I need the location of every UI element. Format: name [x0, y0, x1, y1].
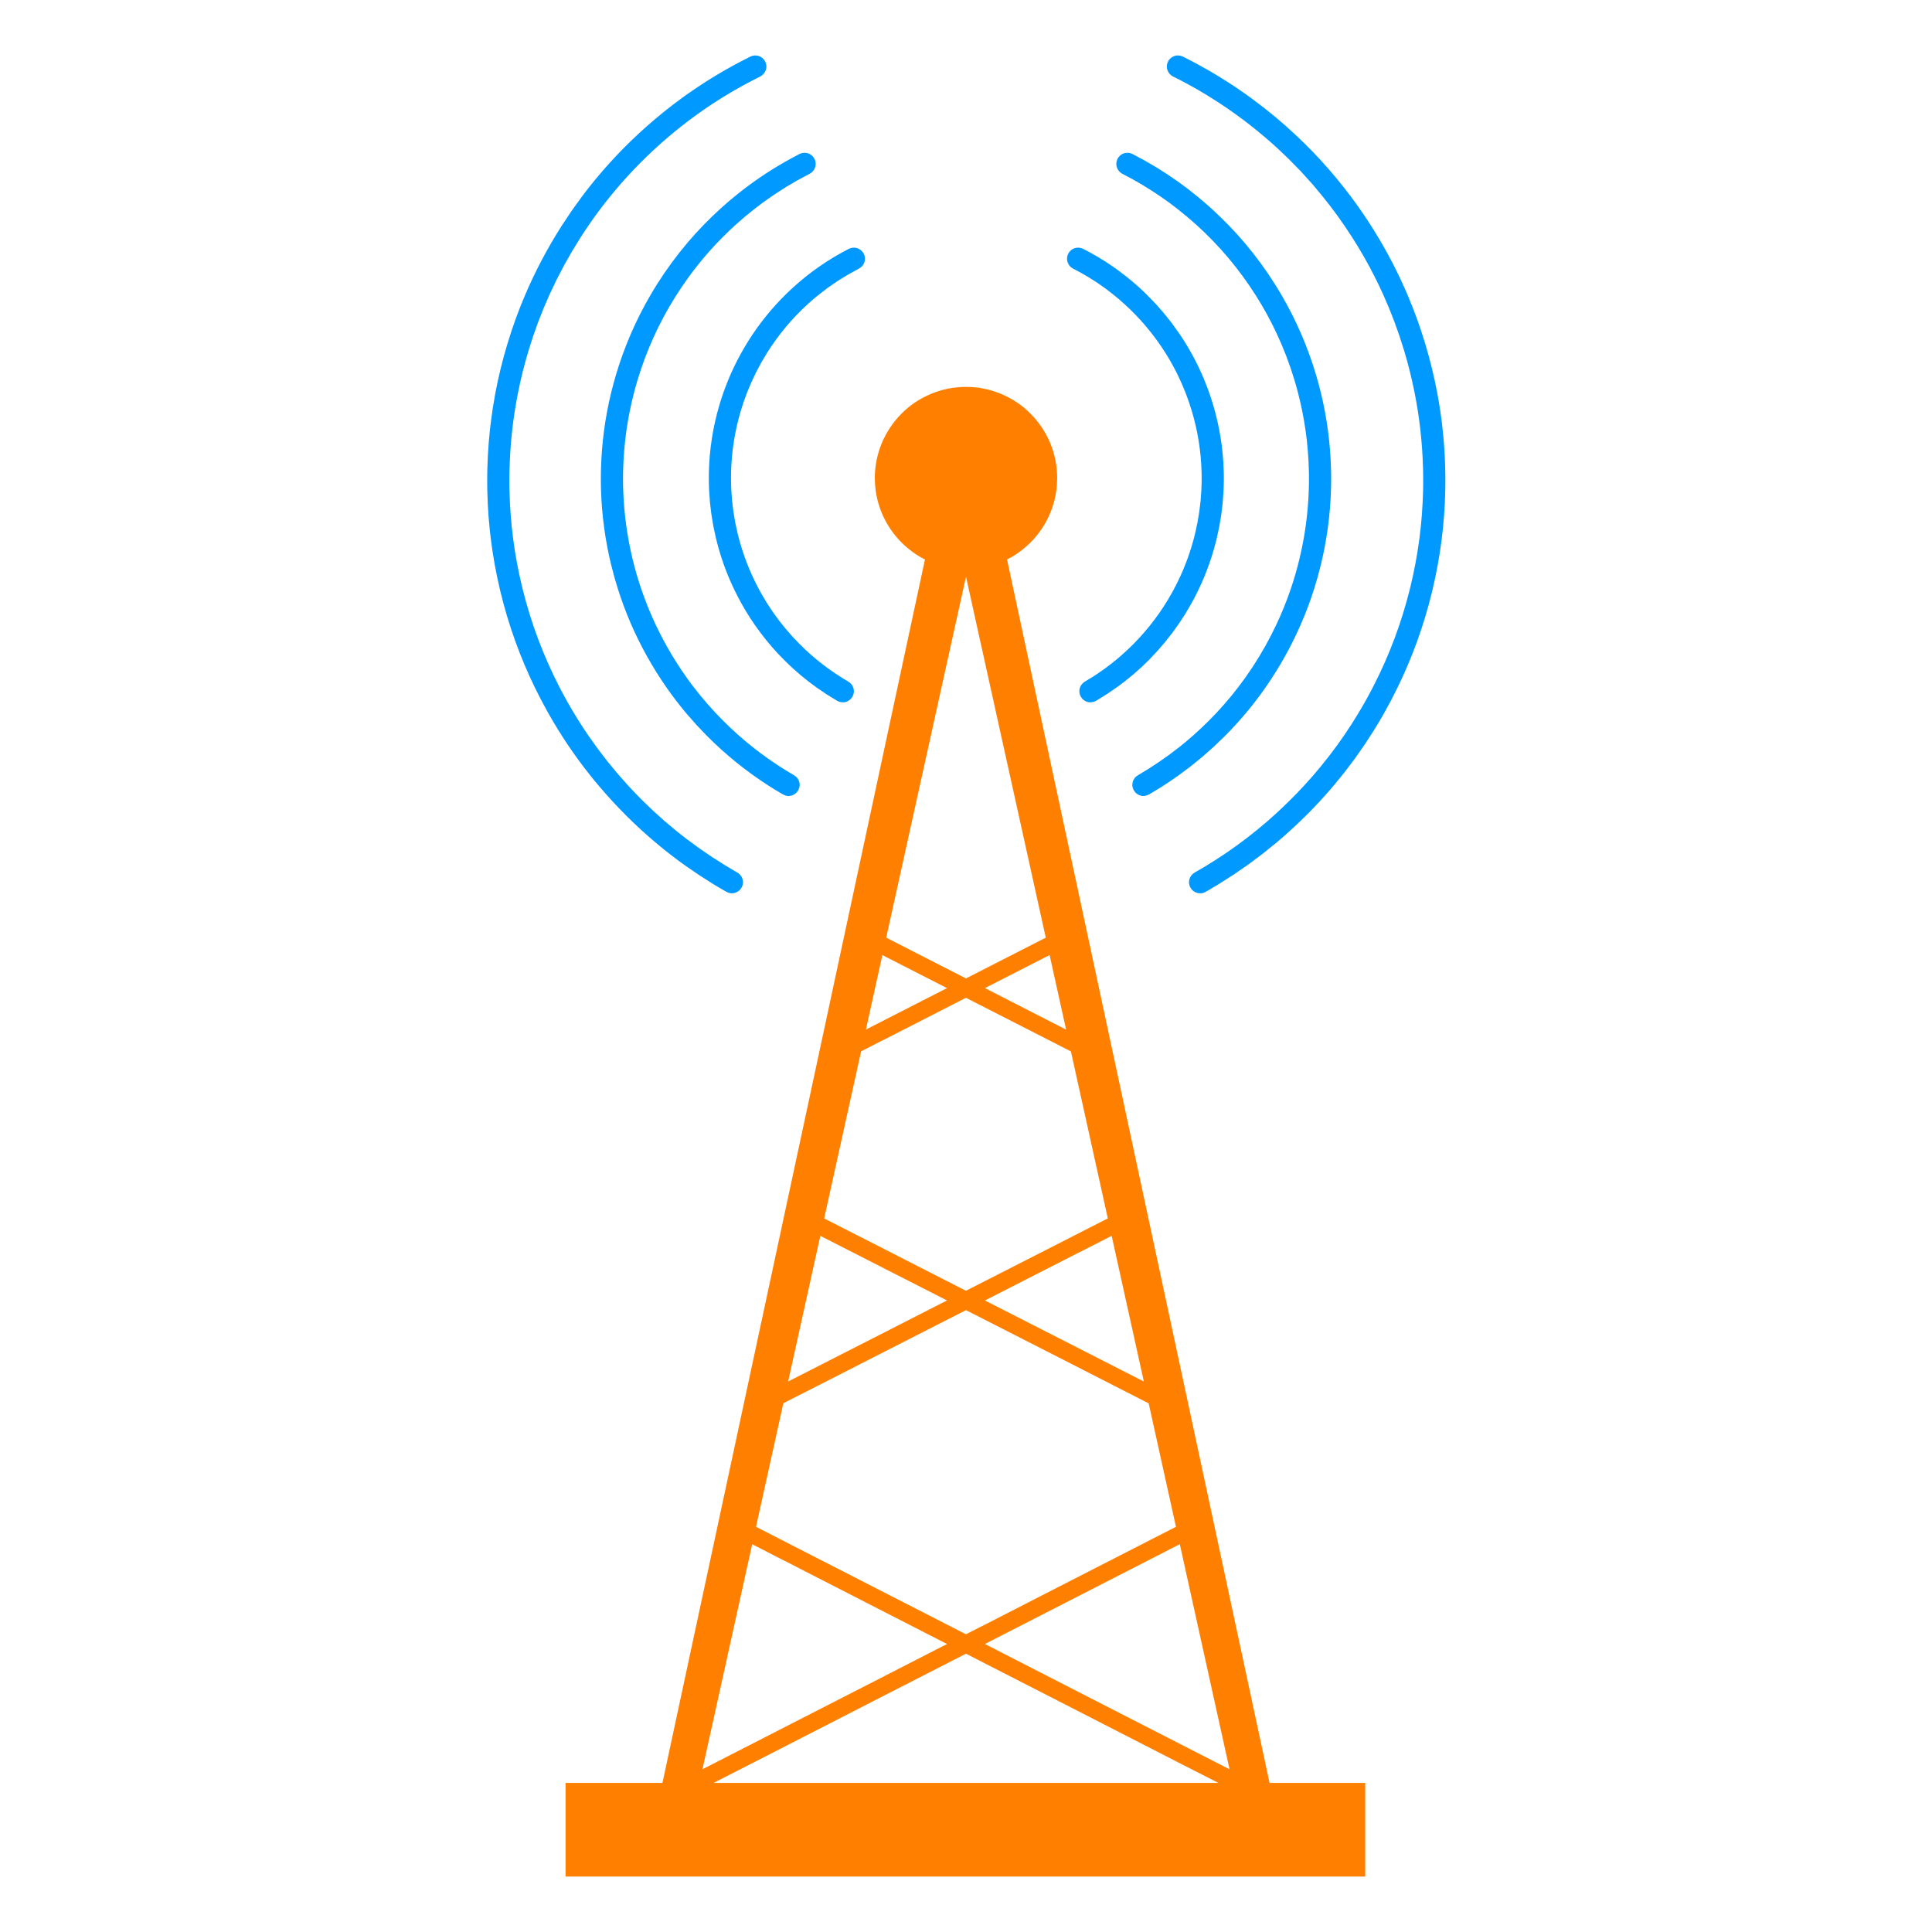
tower	[566, 387, 1366, 1876]
signal waves left	[498, 66, 854, 883]
antenna ball	[875, 387, 1057, 570]
tower legs	[662, 552, 1270, 1787]
cross braces	[688, 934, 1244, 1787]
signal waves right	[1078, 66, 1434, 883]
base	[566, 1783, 1366, 1876]
